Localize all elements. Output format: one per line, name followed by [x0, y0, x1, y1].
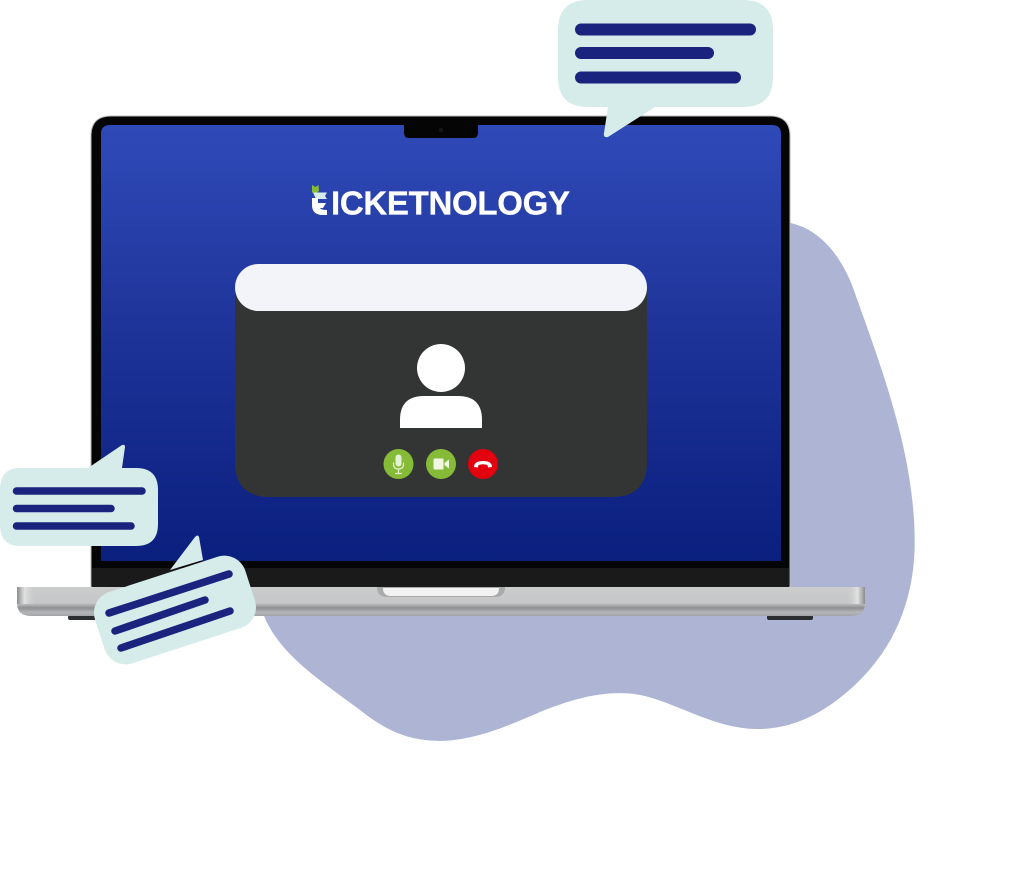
camera — [439, 128, 443, 132]
speech bubble: left — [0, 445, 158, 546]
icon: camera button — [426, 449, 456, 479]
icon: microphone button — [384, 449, 414, 479]
base left end highlight — [17, 587, 36, 604]
speech bubble: tilted — [88, 536, 262, 670]
window header — [235, 264, 647, 311]
laptop lid frame — [91, 116, 790, 587]
laptop — [17, 116, 865, 620]
icon: hang up button — [468, 449, 498, 479]
laptop feet — [68, 615, 813, 620]
speech bubble: top right — [558, 0, 773, 137]
logo mark: stylised t — [313, 192, 327, 199]
base right end highlight — [846, 587, 865, 604]
laptop screen — [101, 125, 781, 561]
background blob — [264, 222, 915, 741]
trackpad notch — [377, 587, 505, 597]
logo text: ICKETNOLOGY — [331, 184, 570, 222]
laptop base — [17, 587, 865, 616]
video call window — [235, 264, 647, 497]
window body — [235, 285, 647, 497]
icon: person — [400, 344, 482, 428]
logo mark: leaf — [312, 185, 319, 192]
lower bezel — [92, 568, 789, 587]
logo — [312, 184, 570, 222]
